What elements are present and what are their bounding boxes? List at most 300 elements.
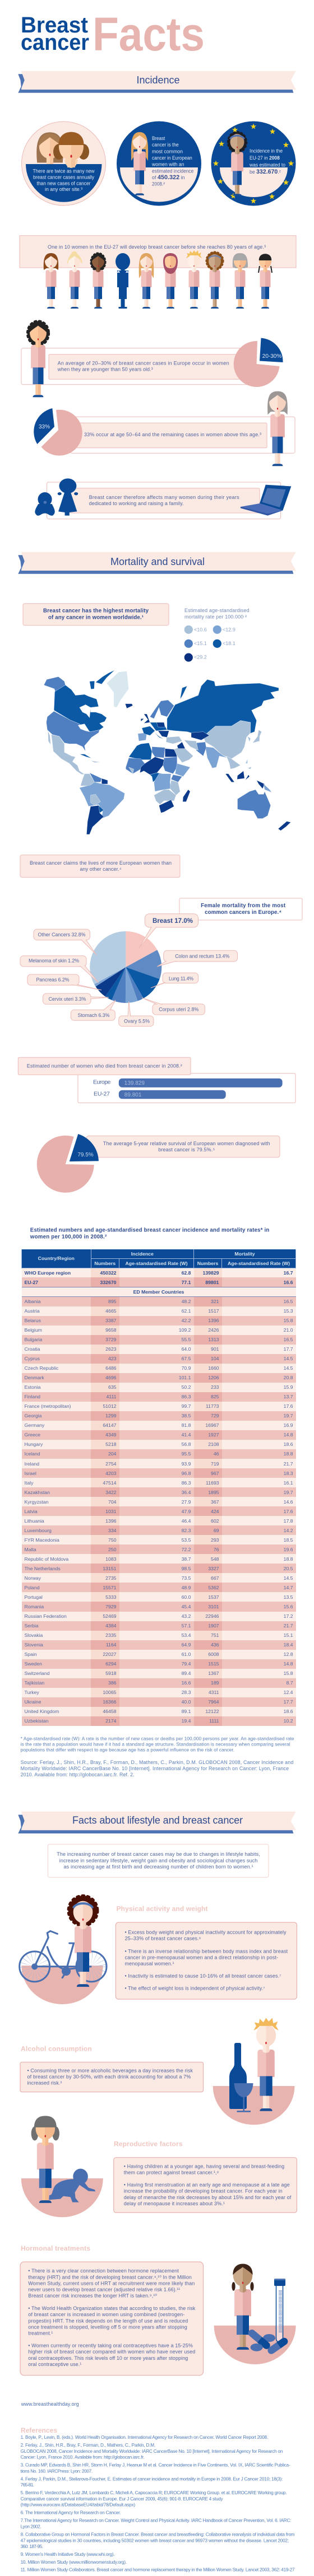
data table: incidence and mortality by country: 4311	[209, 1690, 219, 1695]
references: 6. The International Agency for Research on Cancer.	[21, 2510, 121, 2516]
map legend: Estimated age-standardised	[184, 608, 250, 613]
pie label: Other Cancers	[34, 929, 96, 955]
panel: physical activity and weight: 25–33% of breast cancer cases.⁶	[124, 1936, 201, 1942]
data table: incidence and mortality by country: Mortality	[234, 1251, 255, 1257]
icon: woman with pigtails	[232, 2264, 254, 2350]
data table: incidence and mortality by country: FYR Macedonia	[25, 1537, 59, 1543]
illustration: woman with crawling baby	[21, 2116, 103, 2217]
data table: incidence and mortality by country: 15.9	[284, 1384, 293, 1390]
references: 9. Women's Health Initiative Study (www.whi.org).	[21, 2552, 115, 2557]
data table: incidence and mortality by country: Sweden	[25, 1661, 42, 1667]
data table: incidence and mortality by country: Estonia	[25, 1384, 40, 1390]
data table: incidence and mortality by country: 7929	[105, 1604, 117, 1609]
data table: incidence and mortality by country: 13151	[103, 1566, 117, 1571]
data table: incidence and mortality by country: 101.1	[179, 1375, 191, 1380]
footnote: age-standardised rate	[21, 1735, 294, 1753]
bar chart: women who died: EU-27	[94, 1091, 110, 1098]
data table: incidence and mortality by country: 1907	[208, 1623, 219, 1628]
website URL: www.breasthealthday.org	[21, 2401, 79, 2407]
data table: incidence and mortality by country: Numbers	[94, 1261, 116, 1266]
data table: incidence and mortality by country: 46458	[103, 1709, 117, 1714]
data table: incidence and mortality by country: Malta	[25, 1547, 36, 1552]
pie label: Lung	[151, 973, 198, 988]
text: estimated incidence: of 450.322 in	[152, 174, 185, 181]
data table: incidence and mortality by country: 48.9	[182, 1585, 191, 1590]
callout: female mortality	[179, 898, 302, 920]
data table: incidence and mortality by country: 4111	[106, 1394, 117, 1399]
map legend: <18.1	[223, 641, 236, 646]
panel: reproductive factors: delay of menarche the risk decreases by about 15% and for each year of	[124, 2195, 292, 2200]
data table: incidence and mortality by country: 96.8	[182, 1471, 191, 1476]
data table: incidence and mortality by country: 1537	[208, 1594, 219, 1600]
icon: woman with grey hair	[31, 2116, 59, 2203]
data table: incidence and mortality by country: 1515	[208, 1661, 219, 1667]
panel: hormonal treatments: oral contraceptives. This risk levels off 10 or more years after stopping	[28, 2355, 188, 2361]
text: estimated incidence: Breast	[152, 136, 165, 141]
text: EU-27 incidence: be 332.670.²	[250, 169, 281, 175]
heading ribbon: Mortality and survival: Mortality and survival	[110, 556, 205, 567]
data table: incidence and mortality by country: 9658	[105, 1327, 117, 1333]
panel: physical activity and weight: menopausal women.¹	[124, 1961, 174, 1966]
references: Cancer: Lyon, France 2010. Available from: http://globocan.iarc.fr.	[21, 2455, 145, 2460]
title: Facts: Facts	[93, 8, 205, 60]
map legend: mortality rate per 100.000 ²	[184, 614, 247, 619]
bar chart: women who died: 139.829	[124, 1080, 145, 1086]
source note	[21, 1760, 293, 1777]
data table: incidence and mortality by country: 89801	[205, 1280, 219, 1285]
data table: incidence and mortality by country: 55.5	[182, 1337, 191, 1342]
data table: incidence and mortality by country: The Netherlands	[25, 1566, 61, 1571]
references: (http://www.eurocare.it/DatabaseEU4/tabid/78/Default.aspx)	[21, 2503, 135, 2508]
data table: incidence and mortality by country: 3422	[105, 1490, 117, 1495]
data table: incidence and mortality by country: 22946	[205, 1613, 219, 1619]
data table: incidence and mortality by country: Turkey	[25, 1690, 39, 1695]
data table: incidence and mortality by country: United Kingdom	[25, 1709, 59, 1714]
data table: incidence and mortality by country: Country/Region	[38, 1256, 75, 1261]
data table: incidence and mortality by country: 10065	[103, 1690, 117, 1695]
callout: claims the lives: any other cancer.⁴	[80, 866, 122, 872]
bar chart: women who died	[18, 1057, 295, 1103]
callout: female mortality: Female mortality from the most	[201, 903, 286, 909]
data table: incidence and mortality by country: Switzerland	[25, 1670, 49, 1676]
references: tions No. 160. IARCPress: Lyon: 2007.	[21, 2468, 93, 2474]
data table: incidence and mortality by country: 18.6	[284, 1709, 293, 1714]
data table: incidence and mortality by country: 36.4	[182, 1490, 191, 1495]
data table: incidence and mortality by country: 14.6	[284, 1499, 293, 1505]
references: References	[21, 2426, 57, 2434]
data table: incidence and mortality by country: 86.3	[182, 1394, 191, 1399]
panel: hormonal treatments: progestin) HRT. The risk depends on the length of use and is reduced	[28, 2318, 188, 2323]
pie label: Melanoma: Melanoma of skin 1.2%	[29, 958, 79, 964]
data table: incidence and mortality by country: Slovakia	[25, 1632, 43, 1638]
data table: incidence and mortality by country: Age-standardised Rate (W)	[125, 1261, 188, 1266]
data table: incidence and mortality by country: Finland	[25, 1394, 40, 1399]
data table: incidence and mortality by country: 20.5	[284, 1566, 293, 1571]
icon: woman with curly hair	[27, 321, 49, 397]
data table: incidence and mortality by country: 57.1	[182, 1623, 191, 1628]
map legend: <10.6	[194, 627, 207, 632]
text: estimated incidence: 2008.²	[152, 181, 165, 187]
data table: incidence and mortality by country: 4384	[105, 1623, 117, 1628]
data table: incidence and mortality by country: 42.2	[182, 1318, 191, 1323]
panel: physical activity and weight: • Excess body weight and physical inactivity account for approximately	[124, 1930, 287, 1935]
icons: EU stars	[213, 123, 294, 203]
data table: incidence and mortality by country: 1396	[105, 1518, 117, 1524]
map legend: <15.1	[194, 641, 207, 646]
pie label: Melanoma	[20, 956, 99, 983]
heading ribbon: Mortality and survival	[18, 552, 296, 574]
data table: incidence and mortality by country: 751	[211, 1632, 219, 1638]
data table: incidence and mortality by country: 50.2	[182, 1384, 191, 1390]
heading ribbon: lifestyle	[18, 1812, 296, 1833]
text: twice as many	[33, 168, 95, 192]
references: 7.The International Agency for Research on Cancer. Weight Control and Physical Activity. IARC Handbook of Cancer Prevention, Vol. 6. IARC:	[21, 2518, 291, 2523]
pie label: Stomach: Stomach 6.3%	[77, 1012, 110, 1018]
icon row: ten women	[44, 250, 272, 309]
callout: highest mortality: Breast cancer has the highest mortality	[43, 608, 149, 614]
illustration: woman with pills and test tube	[214, 2264, 296, 2364]
references: Comparative cancer survival information in Europe. Eur J Cancer 2009, 45(6): 901-8. EUROCARE 4 study	[21, 2496, 224, 2502]
data table: incidence and mortality by country: ED Member Countries	[133, 1289, 184, 1295]
data table: incidence and mortality by country: 250	[108, 1547, 117, 1552]
data table: incidence and mortality by country: 15.3	[284, 1308, 293, 1314]
pie chart: 20-30%: 20-30%	[262, 353, 281, 360]
data table: incidence and mortality by country: 14.5	[284, 1356, 293, 1361]
title: Breast cancer: Breast	[21, 13, 88, 38]
illustration: woman with bicycle	[20, 1896, 107, 2004]
data table: incidence and mortality by country: 14.2	[284, 1528, 293, 1533]
data table: incidence and mortality by country: 729	[211, 1413, 219, 1418]
panel: hormonal treatments	[20, 2244, 203, 2376]
data table: incidence and mortality by country: Ukraine	[25, 1699, 41, 1705]
text block: lifestyle intro: as increasing age at first birth and decreasing number of children born to women.¹	[64, 1864, 253, 1870]
panel: alcohol consumption: Alcohol consumption	[21, 2045, 92, 2053]
data table: incidence and mortality by country: 7964	[208, 1699, 219, 1705]
data table: incidence and mortality by country: 47514	[103, 1480, 117, 1486]
data table: incidence and mortality by country: 61.0	[182, 1651, 191, 1657]
pie label: Lung: Lung 11.4%	[169, 976, 193, 982]
pie label: Colon and rectum: Colon and rectum 13.4%	[175, 953, 229, 959]
panel: reproductive factors	[114, 2140, 297, 2213]
data table: incidence and mortality by country: 70.9	[182, 1365, 191, 1371]
data table: incidence and mortality by country: 1313	[208, 1337, 219, 1342]
data table: incidence and mortality by country: 12.4	[284, 1690, 293, 1695]
references: 10. Million Women Study (www.millionwomenstudy.org).	[21, 2560, 127, 2565]
data table: incidence and mortality by country: 56.8	[182, 1441, 191, 1447]
panel: one in ten women	[20, 236, 296, 309]
data table: incidence and mortality by country: 17.7	[284, 1346, 293, 1352]
panel: most common cancer circle	[117, 121, 201, 206]
data table: incidence and mortality by country: 18.4	[284, 1642, 293, 1648]
data table: incidence and mortality by country: 93.9	[182, 1461, 191, 1467]
data table: incidence and mortality by country: 17.7	[284, 1699, 293, 1705]
icon: woman in front	[53, 132, 89, 168]
pie label: Stomach	[71, 1000, 116, 1020]
references: 360: 187-95.	[21, 2544, 43, 2549]
data table: incidence and mortality by country: 14.5	[284, 1575, 293, 1581]
data table: incidence and mortality by country: 1927	[208, 1432, 219, 1438]
data table: incidence and mortality by country: 46	[214, 1451, 219, 1457]
data table: incidence and mortality by country: 11773	[206, 1403, 219, 1409]
data table: incidence and mortality by country: 77.1	[182, 1280, 191, 1285]
pie label: Corpus uteri: Corpus uteri 2.8%	[159, 1007, 198, 1012]
data table: incidence and mortality by country: France (metropolitan)	[25, 1403, 71, 1409]
panel: alcohol consumption: • Consuming three or more alcoholic beverages a day increases the risk	[27, 2068, 193, 2074]
pie label: Pancreas: Pancreas 6.2%	[36, 977, 70, 982]
references: 4. Ferlay J, Parkin, D.M., Steliarova-Foucher, E. Estimates of cancer incidence and mortality in Europe in 2008. Eur J Cancer 2010; 18(3):	[21, 2476, 283, 2481]
illustration: woman with wine bottle	[213, 2018, 295, 2125]
panel: reproductive factors: increase the probability of developing breast cancer. For each year in	[124, 2188, 283, 2194]
pie label: Breast 17.0%	[139, 914, 198, 948]
data table: incidence and mortality by country: 548	[211, 1556, 219, 1562]
source note: 2010. Available from: http://globocan.iarc.fr. Ref. 2.	[21, 1772, 135, 1777]
data table: incidence and mortality by country: 53.4	[182, 1632, 191, 1638]
data table: incidence and mortality by country: 602	[211, 1518, 219, 1524]
data table: incidence and mortality by country: 1206	[208, 1375, 219, 1380]
data table: incidence and mortality by country: 12122	[205, 1709, 219, 1714]
data table: incidence and mortality by country: 967	[211, 1471, 219, 1476]
data table: incidence and mortality by country: 18.8	[284, 1451, 293, 1457]
callout: claims the lives: Breast cancer claims the lives of more European women than	[30, 860, 172, 866]
data table: incidence and mortality by country: 79.4	[182, 1661, 191, 1667]
data table: incidence and mortality by country: 2335	[105, 1632, 117, 1638]
data table: incidence and mortality by country: 332670	[100, 1280, 117, 1285]
data table: incidence and mortality by country: 1396	[208, 1318, 219, 1323]
icon: test tube	[274, 2279, 285, 2342]
table title: women per 100,000 in 2008.²	[30, 1234, 107, 1240]
data table: incidence and mortality by country: Greece	[25, 1432, 40, 1438]
icon: woman with headband	[228, 132, 247, 196]
icon: woman with spiky hair	[253, 2018, 279, 2111]
data table: incidence and mortality by country: 72.2	[182, 1547, 191, 1552]
data table: incidence and mortality by country: 76	[214, 1547, 219, 1552]
data table: incidence and mortality by country: 189	[211, 1680, 219, 1686]
data table: incidence and mortality by country: 204	[108, 1451, 117, 1457]
text: estimated incidence	[151, 136, 193, 187]
map legend: <29.2	[194, 655, 207, 660]
data table: incidence and mortality by country: 12.8	[284, 1651, 293, 1657]
pie label: Breast 17.0%: Breast 17.0%	[153, 918, 193, 925]
panel: hormonal treatments: Women Study, current users of HRT at recruitment were more likely than	[28, 2280, 195, 2286]
data table: incidence and mortality by country: 18.3	[284, 1471, 293, 1476]
data table: incidence and mortality by country: Israel	[25, 1471, 36, 1476]
data table: incidence and mortality by country: Cyprus	[25, 1356, 40, 1361]
text: work and family: Breast cancer therefore affects many women during their years	[89, 494, 239, 500]
data table: incidence and mortality by country: Belarus	[25, 1318, 41, 1323]
data table: incidence and mortality by country: Tajikistan	[25, 1680, 44, 1686]
data table: incidence and mortality by country: 3387	[105, 1318, 117, 1323]
data table: incidence and mortality by country: 62.8	[182, 1270, 191, 1276]
data table: incidence and mortality by country: 64147	[103, 1422, 117, 1428]
icons: baby and girl	[35, 478, 78, 516]
data table: incidence and mortality by country: 16.5	[284, 1299, 293, 1304]
panel: hormonal treatments: • Women currently or recently taking oral contraceptives have a 15-25%	[28, 2343, 193, 2349]
icon: laptop	[241, 485, 291, 516]
panel: 20-30% under 50	[21, 321, 283, 397]
text: 20-30%	[57, 361, 229, 372]
data table: incidence and mortality by country: 4696	[105, 1375, 117, 1380]
data table: incidence and mortality by country: 15.1	[284, 1632, 293, 1638]
panel: physical activity and weight: cancer in pre-menopausal women and a direct relationship in post-	[124, 1954, 278, 1960]
references: 1. Boyle, P., Levin, B. (eds.). World Health Organisation. International Agency for Research on Cancer. World Cancer Report 2008.	[21, 2435, 268, 2440]
data table: incidence and mortality by country: 16366	[103, 1699, 117, 1705]
data table: incidence and mortality by country: 14.5	[284, 1365, 293, 1371]
references: 3. Curado MP, Edwards B, Shin HR, Storm H, Ferlay J, Heanue M et al. Cancer Incidence in Five Continents, Vol. IX, IARC Scientific Publica-	[21, 2463, 290, 2468]
text: estimated incidence: women with an	[151, 162, 184, 167]
data table: incidence and mortality by country: Republic of Moldova	[25, 1556, 68, 1562]
panel: hormonal treatments: treatment.¹	[28, 2330, 53, 2336]
pie label: Ovary	[119, 1001, 154, 1026]
panel: alcohol consumption: increased risk.¹	[27, 2080, 62, 2086]
bar chart: women who died: Estimated number of women who died from breast cancer in 2008.²	[27, 1063, 182, 1069]
data table: incidence and mortality by country: 17.6	[284, 1403, 293, 1409]
data table: incidence and mortality by country: 16.9	[284, 1422, 293, 1428]
text: EU-27 incidence	[249, 148, 285, 175]
data table: incidence and mortality by country: 20.8	[284, 1375, 293, 1380]
data table: incidence and mortality by country: 17.6	[284, 1509, 293, 1514]
text: twice as many: than new cases of cancer	[37, 180, 91, 186]
data table: incidence and mortality by country: Denmark	[25, 1375, 44, 1380]
data table: incidence and mortality by country: 4203	[105, 1471, 117, 1476]
panel: physical activity and weight: Physical activity and weight	[117, 1905, 207, 1913]
panel: reproductive factors: them can protect against breast cancer.¹,⁸	[124, 2169, 219, 2175]
heading ribbon: Incidence	[18, 71, 296, 93]
data table: incidence and mortality by country: 22027	[103, 1651, 117, 1657]
bar chart: women who died: Europe	[93, 1079, 111, 1086]
text: twice as many: breast cancer cases annually	[33, 175, 94, 180]
panel: physical activity and weight: • There is an inverse relationship between body mass index and breast	[124, 1948, 288, 1954]
icon: bicycle	[20, 1931, 107, 1982]
data table: incidence and mortality by country: 16.6	[284, 1280, 293, 1285]
data table: incidence and mortality by country: Austria	[25, 1308, 40, 1314]
text: twice as many: There are twice as many new	[33, 168, 95, 174]
data table: incidence and mortality by country: 21.0	[284, 1327, 293, 1333]
data table: incidence and mortality by country: 450322	[100, 1270, 117, 1276]
panel: hormonal treatments: therapy (HRT) and the risk of developing breast cancer.⁹,¹⁰ In the Million	[28, 2274, 192, 2280]
text: 20-30%: An average of 20–30% of breast cancer cases in Europe occur in women	[58, 361, 229, 366]
data table: incidence and mortality by country: 18.6	[284, 1441, 293, 1447]
icon: crawling baby	[49, 2169, 95, 2202]
data table: incidence and mortality by country: 4349	[105, 1432, 117, 1438]
callout: 5-year survival	[86, 1136, 280, 1158]
data table: incidence and mortality by country: 81.8	[182, 1422, 191, 1428]
references	[21, 2426, 295, 2573]
data table: incidence and mortality by country: 1660	[208, 1365, 219, 1371]
data table: incidence and mortality by country: 424	[211, 1509, 219, 1514]
pie label: Pancreas	[27, 974, 101, 990]
data table: incidence and mortality by country: 1083	[105, 1556, 117, 1562]
text block: lifestyle intro: The increasing number of breast cancer cases may be due to changes in lifestyle habits,	[57, 1851, 260, 1857]
data table: incidence and mortality by country: 2108	[208, 1441, 219, 1447]
data table: incidence and mortality by country: 62.1	[182, 1308, 191, 1314]
references: Lyon 2002.	[21, 2524, 41, 2529]
data table: incidence and mortality by country: Albania	[25, 1299, 40, 1304]
title: Breast cancer: cancer	[21, 30, 89, 55]
callout: highest mortality: of any cancer in women worldwide.¹	[48, 615, 144, 620]
data table: incidence and mortality by country: 38.7	[182, 1556, 191, 1562]
pie label: Cervix uteri: Cervix uteri 3.3%	[48, 996, 86, 1002]
data table: incidence and mortality by country: 99.7	[182, 1403, 191, 1409]
data table: incidence and mortality by country: 10.2	[284, 1718, 293, 1724]
data table: incidence and mortality by country: 5918	[105, 1670, 117, 1676]
title: Breast cancer	[21, 13, 89, 55]
icon: woman behind	[36, 132, 63, 165]
data table: incidence and mortality by country: 17.8	[284, 1518, 293, 1524]
text: work and family	[89, 494, 239, 506]
panel: work and family	[35, 478, 291, 519]
data table: incidence and mortality by country: Slovenia	[25, 1642, 43, 1648]
data table: incidence and mortality by country: 321	[211, 1299, 219, 1304]
data table: incidence and mortality by country: Croatia	[25, 1346, 40, 1352]
data table: incidence and mortality by country: 18.8	[284, 1556, 293, 1562]
data table: incidence and mortality by country: 719	[211, 1461, 219, 1467]
panel: twice as many cases circle	[21, 122, 105, 206]
data table: incidence and mortality by country: Portugal	[25, 1594, 43, 1600]
data table: incidence and mortality by country: 19.4	[182, 1718, 191, 1724]
panel: physical activity and weight: • The effect of weight loss is independent of physical activity.⁷	[124, 1986, 265, 1991]
data table: incidence and mortality by country: 95.5	[182, 1451, 191, 1457]
data table: incidence and mortality by country: 139829	[203, 1270, 219, 1276]
data table: incidence and mortality by country: 89.4	[182, 1670, 191, 1676]
data table: incidence and mortality by country: Spain	[25, 1651, 37, 1657]
data table: incidence and mortality by country: 436	[211, 1642, 219, 1648]
text: 33%: 33% occur at age 50–64 and the remaining cases in women above this age.³	[84, 432, 261, 437]
map legend	[184, 608, 250, 662]
panel: reproductive factors: • Having children at a younger age, having several and breast-feeding	[124, 2163, 284, 2169]
data table: incidence and mortality by country: 13.5	[284, 1594, 293, 1600]
data table: incidence and mortality by country: 825	[211, 1394, 219, 1399]
data table: incidence and mortality by country: 15.6	[284, 1604, 293, 1609]
icon: pills	[247, 2328, 289, 2355]
data table: incidence and mortality by country: 5333	[105, 1594, 117, 1600]
data table: incidence and mortality by country: 2735	[105, 1575, 117, 1581]
data table: incidence and mortality by country: 21.7	[284, 1623, 293, 1628]
data table: incidence and mortality by country: Czech Republic	[25, 1365, 58, 1371]
footnote: age-standardised rate: populations that differ with respect to age because age has a powerful influence on the risk of cancer.	[21, 1747, 234, 1753]
bar chart: women who died: 89.801	[124, 1092, 142, 1098]
data table: incidence and mortality by country: 1517	[208, 1308, 219, 1314]
data table: incidence and mortality by country: 293	[211, 1537, 219, 1543]
data table: incidence and mortality by country: 21.7	[284, 1461, 293, 1467]
pie label: Cervix uteri	[43, 993, 109, 1004]
data table: incidence and mortality by country: Iceland	[25, 1451, 40, 1457]
icon: bottle	[229, 2043, 247, 2109]
panel: hormonal treatments: higher risk of breast cancer compared with women who have never used	[28, 2349, 195, 2355]
data table: incidence and mortality by country: Incidence	[131, 1251, 154, 1257]
text: EU-27 incidence: Incidence in the	[250, 148, 283, 154]
text: estimated incidence: cancer in European	[152, 155, 192, 161]
data table: incidence and mortality by country: 15.8	[284, 1318, 293, 1323]
text: 20-30%: when they are younger than 50 years old.³	[57, 367, 153, 372]
data table: incidence and mortality by country: 48.2	[182, 1299, 191, 1304]
panel: physical activity and weight: • Inactivity is estimated to cause 10-16% of all breast cancer cases.⁷	[124, 1973, 281, 1979]
data table: incidence and mortality by country: 52469	[103, 1613, 117, 1619]
panel: physical activity and weight	[116, 1905, 297, 1999]
pie chart: female mortality by cancer	[90, 931, 161, 1003]
data table: incidence and mortality by country: 60.0	[182, 1594, 191, 1600]
data table: incidence and mortality by country: 5362	[208, 1585, 219, 1590]
data table: incidence and mortality by country: WHO Europe region	[25, 1270, 71, 1276]
data table: incidence and mortality by country: 895	[108, 1299, 117, 1304]
panel: alcohol consumption	[20, 2045, 203, 2092]
data table: incidence and mortality by country: 51012	[103, 1403, 117, 1409]
data table: incidence and mortality by country: Poland	[25, 1585, 40, 1590]
data table: incidence and mortality by country: 19.7	[284, 1413, 293, 1418]
data table: incidence and mortality by country: 3327	[208, 1566, 219, 1571]
data table: incidence and mortality by country: 423	[108, 1356, 117, 1361]
data table: incidence and mortality by country: 40.0	[182, 1699, 191, 1705]
heading ribbon: Incidence: Incidence	[136, 74, 180, 86]
